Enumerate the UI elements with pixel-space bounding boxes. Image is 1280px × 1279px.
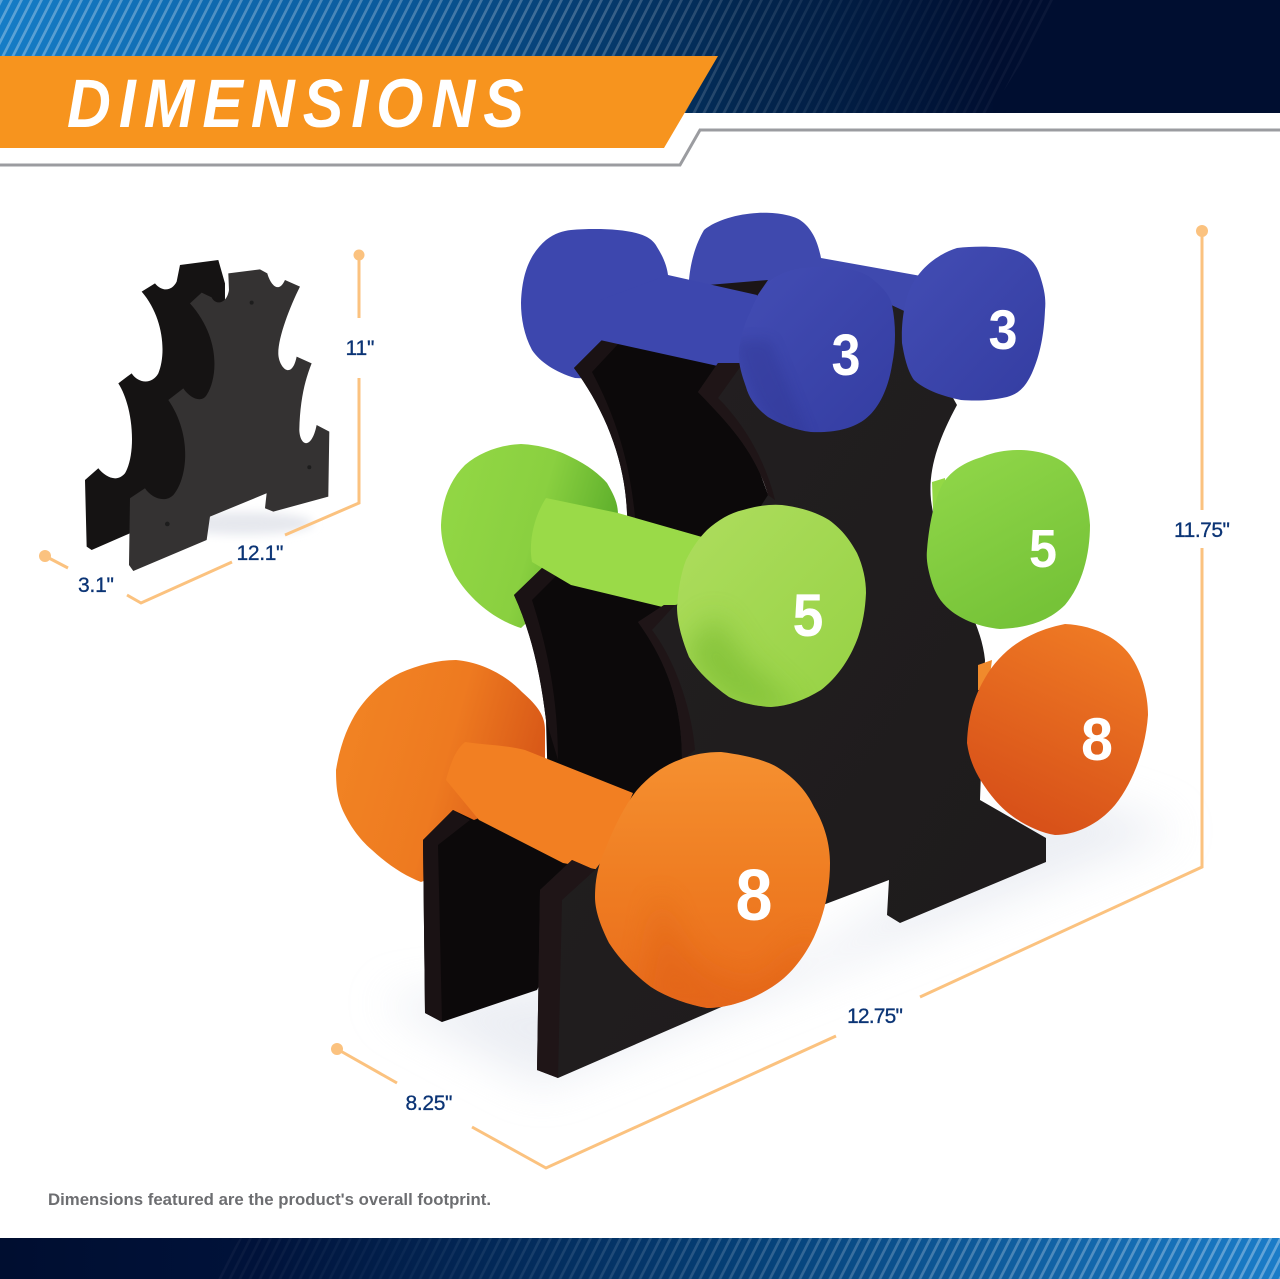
large rack dimension lines: [331, 225, 1208, 1168]
back plate of rack: [423, 338, 770, 1022]
number 3: 3: [988, 298, 1018, 361]
number 3: 3: [832, 323, 860, 388]
rack back plate: [85, 260, 225, 550]
footer band: [0, 1238, 1280, 1279]
near green head: [677, 505, 866, 714]
label: 8.25 in: 8.25": [406, 1092, 452, 1115]
front plate of rack: [537, 300, 1046, 1078]
main product: dumbbells on rack: [336, 213, 1148, 1078]
footnote: Dimensions featured are the product's overall footprint.: [48, 1191, 491, 1209]
green bar: [531, 498, 702, 610]
floor shadow: [380, 790, 1180, 1085]
rear blue right head: [902, 247, 1045, 401]
far orange head: [336, 660, 545, 882]
front blue near head: [739, 300, 895, 432]
back plate tab edges: [423, 338, 636, 1022]
label: 11 in: 11": [346, 337, 374, 360]
near orange head: [595, 752, 830, 1030]
label: 3.1 in: 3.1": [78, 574, 114, 597]
label: 11.75 in: 11.75": [1174, 519, 1230, 542]
right green head: [927, 450, 1090, 629]
label: 12.1 in: 12.1": [236, 542, 284, 565]
number 8: 8: [1081, 706, 1113, 773]
far green head: [441, 444, 620, 628]
title: DIMENSIONS: [67, 64, 524, 142]
number 5: 5: [1029, 519, 1057, 579]
black rear top bits: [696, 280, 904, 343]
number 8: 8: [736, 856, 772, 936]
header band: [0, 0, 1280, 113]
rear blue left head and bar: [689, 213, 921, 320]
small rack dimension lines: [39, 250, 364, 603]
header rule: [0, 130, 1280, 165]
label: 12.75 in: 12.75": [847, 1005, 903, 1028]
right orange head: [967, 624, 1148, 835]
number 5: 5: [792, 582, 824, 649]
orange bar: [446, 742, 633, 870]
right-hand bar stubs: [932, 478, 945, 510]
front blue left head: [521, 229, 700, 380]
title banner: [0, 56, 718, 148]
blue bar front: [600, 275, 757, 372]
front plate tab edges: [537, 363, 775, 1078]
small rack photo: [85, 260, 329, 571]
rack front plate: [129, 269, 329, 571]
